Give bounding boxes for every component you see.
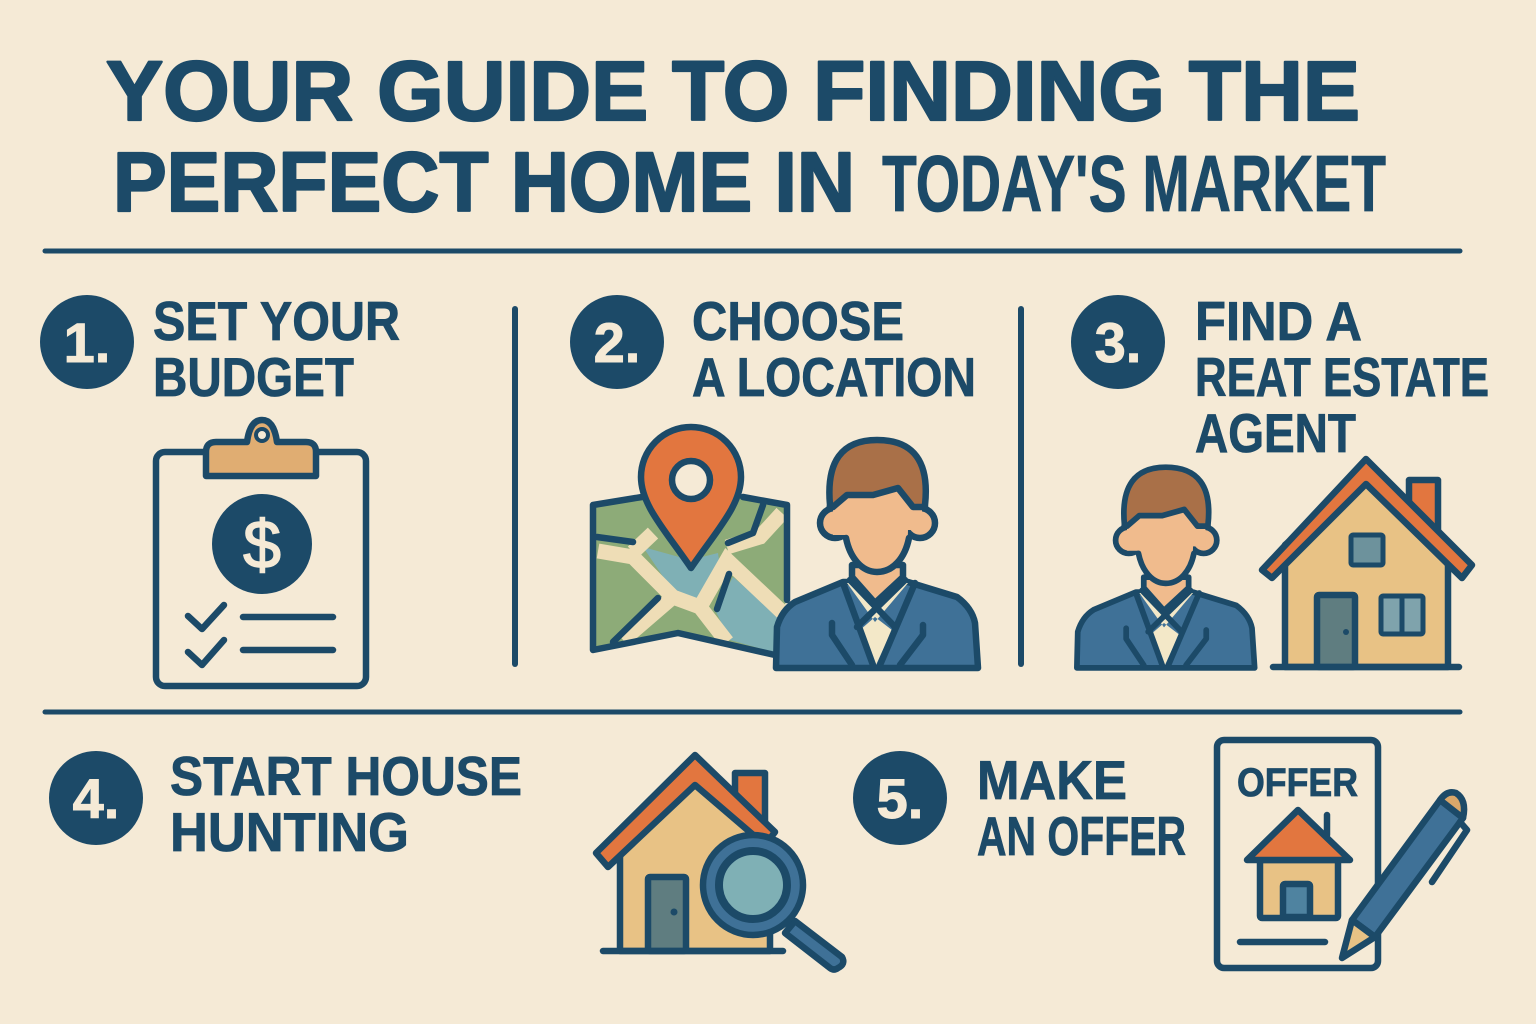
icon: offer document with pen: [1217, 740, 1467, 968]
step 2 heading: CHOOSE: [692, 290, 904, 352]
step 3 number badge: [1071, 295, 1165, 389]
step 1 heading: BUDGET: [153, 346, 354, 408]
step 3 number badge: 3.: [1095, 311, 1141, 374]
icon: offer document with pen: OFFER: [1237, 761, 1358, 805]
icon: map with pin: [593, 427, 787, 655]
icon: house (step 3): [1262, 459, 1472, 667]
step 3 heading: [1195, 290, 1489, 464]
title: PERFECT HOME IN: [113, 135, 855, 229]
step 5 number badge: 5.: [877, 767, 923, 830]
step 4 heading: [170, 745, 522, 863]
step 5 heading: [977, 749, 1186, 867]
step 4 number badge: [49, 751, 143, 845]
step 4 heading: HUNTING: [170, 801, 409, 863]
step 5 number badge: [853, 751, 947, 845]
step 1 heading: SET YOUR: [153, 290, 400, 352]
step 2 number badge: [570, 295, 664, 389]
step 2 heading: A LOCATION: [692, 346, 976, 408]
title: [106, 44, 1386, 229]
step 5 heading: MAKE: [977, 749, 1127, 811]
title: YOUR GUIDE TO FINDING THE: [106, 44, 1360, 138]
step 4 heading: START HOUSE: [170, 745, 522, 807]
icon: agent person (step 3): [1077, 467, 1255, 668]
step 3 heading: FIND A: [1195, 290, 1362, 352]
step 5 heading: AN OFFER: [977, 805, 1186, 867]
icon: budget clipboard: [156, 420, 366, 686]
step 3 heading: AGENT: [1195, 402, 1356, 464]
icon: budget clipboard: $: [243, 507, 281, 583]
step 4 number badge: 4.: [73, 767, 119, 830]
step 1 heading: [153, 290, 400, 408]
step 2 number badge: 2.: [594, 311, 640, 374]
icon: house with magnifying glass: [596, 755, 843, 970]
step 1 number badge: 1.: [64, 311, 110, 374]
step 1 number badge: [40, 295, 134, 389]
step 2 heading: [692, 290, 976, 408]
icon: agent person (step 2): [776, 440, 978, 668]
